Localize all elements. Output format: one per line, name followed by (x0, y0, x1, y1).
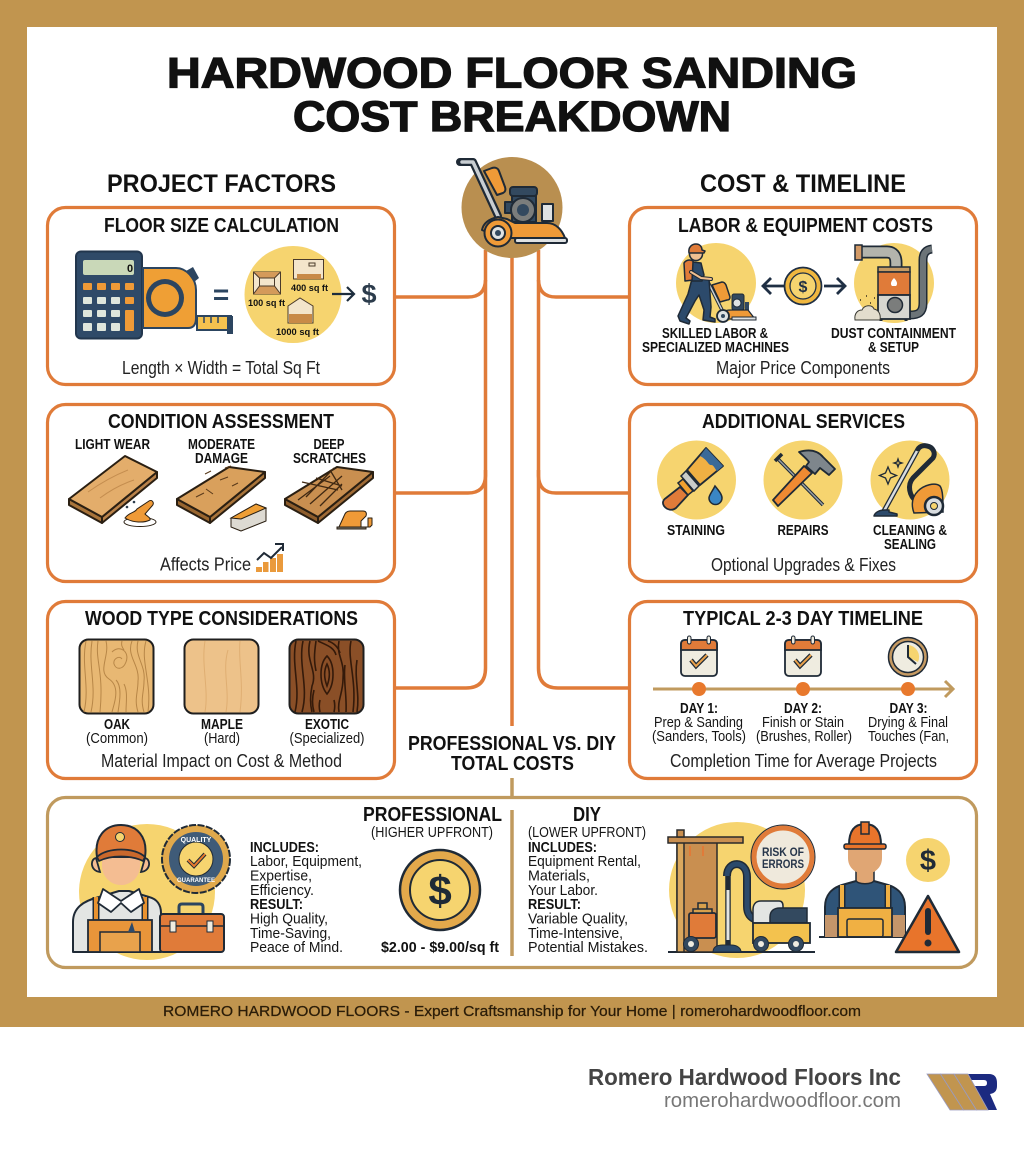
label: oak: (Common) (86, 730, 148, 747)
label: light wear: LIGHT WEAR (75, 437, 150, 453)
swatch: exotic (290, 640, 364, 714)
panel: condition assessment (48, 404, 394, 582)
icon: rising price chart (256, 544, 283, 572)
day 1 text: (Sanders, Tools) (652, 728, 746, 745)
text: diy includes and result: Materials, (528, 868, 590, 884)
icon: dollar coin: $ (428, 867, 452, 914)
label: skilled labor: SPECIALIZED MACHINES (642, 340, 789, 356)
title: HARDWOOD FLOOR SANDING (167, 50, 857, 98)
day 1 text: DAY 1: (680, 700, 718, 717)
swatch: maple (184, 640, 258, 714)
label: dust containment (831, 326, 956, 356)
icon: calculator: 0 (127, 263, 133, 275)
icon: risk of errors seal (751, 825, 815, 889)
icon: price arrows and coin (763, 268, 845, 304)
panel: labor and equipment costs (630, 208, 976, 384)
icon: light wear plank (69, 456, 157, 526)
icon: quality guarantee badge (162, 825, 230, 893)
icon: price arrows and coin: $ (799, 279, 808, 296)
label: deep scratches: SCRATCHES (293, 451, 366, 467)
icon: deep scratches plank (285, 467, 373, 529)
formula caption: Length × Width = Total Sq Ft (122, 358, 320, 378)
icon: worker with sander (676, 243, 756, 324)
text: diy includes and result: Equipment Rental, (528, 853, 641, 870)
label: deep scratches (293, 437, 366, 467)
text: diy includes and result: RESULT: (528, 896, 581, 913)
heading: project factors: PROJECT FACTORS (107, 170, 336, 198)
arrow to dollar (332, 287, 354, 301)
heading: professional vs diy: PROFESSIONAL VS. DIY (408, 733, 617, 755)
panel: professional vs diy (48, 798, 976, 968)
label: repairs: REPAIRS (778, 523, 829, 539)
icon: quality guarantee badge: GUARANTEE (177, 878, 215, 884)
text: professional includes and result: High Quality, (250, 910, 328, 928)
caption: Material Impact on Cost & Method (101, 751, 342, 771)
heading: professional vs diy: TOTAL COSTS (451, 753, 574, 775)
icon: risk of errors seal: ERRORS (762, 859, 804, 871)
day 3 text (868, 700, 949, 745)
icon: vacuum cleaner (870, 440, 950, 520)
footer strip text: ROMERO HARDWOOD FLOORS - Expert Craftsmanship for Your Home | romerohardwoodfloor.com (163, 1003, 861, 1020)
label: maple: MAPLE (201, 717, 243, 733)
icon: dollar circle (906, 838, 950, 882)
day 1 text: Prep & Sanding (654, 714, 743, 731)
icon: room sizes circle: 100 sq ft (248, 298, 286, 309)
brand logo (927, 1074, 997, 1110)
heading: professional: (HIGHER UPFRONT) (371, 824, 493, 841)
text: diy includes and result: Variable Quality, (528, 910, 628, 928)
equals sign: = (213, 279, 229, 310)
label: cleaning and sealing: CLEANING & (873, 523, 947, 539)
icon: dollar coin (400, 850, 480, 930)
icon: room sizes circle (244, 246, 342, 343)
icon: room sizes circle: 400 sq ft (291, 283, 329, 294)
white content area (27, 27, 997, 997)
icon: tape measure (143, 267, 233, 334)
heading: CONDITION ASSESSMENT (108, 411, 334, 433)
text: professional includes and result: RESULT: (250, 896, 303, 913)
icon: clock (888, 638, 928, 676)
icon: calendar day 2 (785, 636, 821, 676)
heading: diy: (LOWER UPFRONT) (528, 824, 646, 841)
swatch: oak (80, 640, 154, 714)
caption: Completion Time for Average Projects (670, 751, 937, 771)
label: cleaning and sealing: SEALING (884, 537, 936, 553)
text: professional includes and result: INCLUDES: (250, 839, 319, 856)
dollar sign: $ (361, 279, 377, 309)
text: diy includes and result: Time-Intensive, (528, 925, 623, 942)
icon: calendar day 1 (681, 636, 717, 676)
text: professional includes and result (250, 839, 362, 956)
icon: room sizes circle: 1000 sq ft (276, 327, 320, 338)
caption: Major Price Components (716, 358, 890, 378)
day 1 text (652, 700, 746, 745)
icon: toolbox (160, 904, 224, 952)
icon: quality guarantee badge: QUALITY (181, 837, 212, 844)
icon: paint brush (657, 440, 736, 520)
day 2 text: DAY 2: (784, 700, 822, 717)
text: professional includes and result: Peace of Mind. (250, 939, 343, 956)
icon: floor sander hub (460, 157, 567, 258)
label: exotic: (Specialized) (290, 730, 364, 747)
title: COST BREAKDOWN (293, 94, 731, 141)
label: maple: (Hard) (204, 730, 240, 747)
icon: risk of errors seal: RISK OF (762, 847, 804, 859)
heading: diy: DIY (573, 804, 602, 826)
icon: dollar circle: $ (920, 845, 936, 877)
icon: moderate damage plank (177, 466, 266, 531)
icon: dust containment unit (854, 243, 934, 323)
label: oak (86, 717, 148, 747)
day 3 text: DAY 3: (890, 700, 928, 717)
heading: professional vs diy (408, 733, 617, 775)
text: diy includes and result: Potential Mistakes. (528, 939, 648, 956)
label: skilled labor: SKILLED LABOR & (662, 326, 768, 342)
text: diy includes and result: INCLUDES: (528, 839, 597, 856)
heading: professional (363, 804, 502, 841)
brand: company name (588, 1064, 901, 1112)
panel: additional services (630, 404, 976, 582)
day 2 text (756, 700, 852, 745)
title (167, 50, 857, 141)
text: diy includes and result: Your Labor. (528, 882, 598, 899)
caption: Affects Price (160, 554, 251, 574)
label: dust containment: DUST CONTAINMENT (831, 326, 956, 342)
icon: calculator (76, 252, 142, 338)
label: oak: OAK (104, 717, 130, 733)
text: professional includes and result: Expertise, (250, 868, 312, 884)
timeline arrow (653, 681, 953, 697)
icon: diy worker (819, 822, 905, 937)
heading: professional: PROFESSIONAL (363, 804, 502, 826)
heading: FLOOR SIZE CALCULATION (104, 215, 339, 237)
text: professional includes and result: Labor, Equipment, (250, 853, 362, 870)
label: staining: STAINING (667, 523, 725, 539)
label: exotic: EXOTIC (305, 717, 349, 733)
text: professional includes and result: Time-Saving, (250, 925, 331, 942)
brand: company name: romerohardwoodfloor.com (664, 1090, 901, 1112)
label: moderate damage (188, 437, 255, 467)
label: moderate damage: MODERATE (188, 437, 255, 453)
panel: wood type considerations (48, 602, 394, 778)
day 2 text: Finish or Stain (762, 714, 844, 731)
heading: ADDITIONAL SERVICES (702, 411, 905, 433)
text: professional includes and result: Efficiency. (250, 882, 314, 899)
icon: hammer and nail (764, 440, 842, 520)
brand: company name: Romero Hardwood Floors Inc (588, 1064, 901, 1090)
price range: $2.00 - $9.00/sq ft (381, 939, 499, 956)
icon: professional worker (73, 824, 215, 960)
label: moderate damage: DAMAGE (195, 451, 248, 467)
day 2 text: (Brushes, Roller) (756, 728, 852, 745)
day 3 text: Touches (Fan, (868, 728, 949, 745)
label: dust containment: & SETUP (868, 340, 919, 356)
heading: cost and timeline: COST & TIMELINE (700, 170, 906, 198)
icon: warning triangle (896, 896, 959, 952)
label: cleaning and sealing (873, 523, 947, 553)
heading: WOOD TYPE CONSIDERATIONS (85, 608, 358, 630)
panel: floor size calculation (48, 208, 394, 384)
caption: Optional Upgrades & Fixes (711, 555, 896, 575)
connector lines (395, 250, 629, 956)
label: exotic (290, 717, 364, 747)
icon: diy equipment (668, 822, 815, 958)
heading: LABOR & EQUIPMENT COSTS (678, 215, 933, 237)
text: diy includes and result (528, 839, 648, 956)
heading: TYPICAL 2-3 DAY TIMELINE (683, 608, 923, 630)
panel: typical 2-3 day timeline (630, 602, 976, 778)
heading: diy (528, 804, 646, 841)
label: maple (201, 717, 243, 747)
label: skilled labor (642, 326, 789, 356)
day 3 text: Drying & Final (868, 714, 948, 731)
label: deep scratches: DEEP (314, 437, 345, 453)
